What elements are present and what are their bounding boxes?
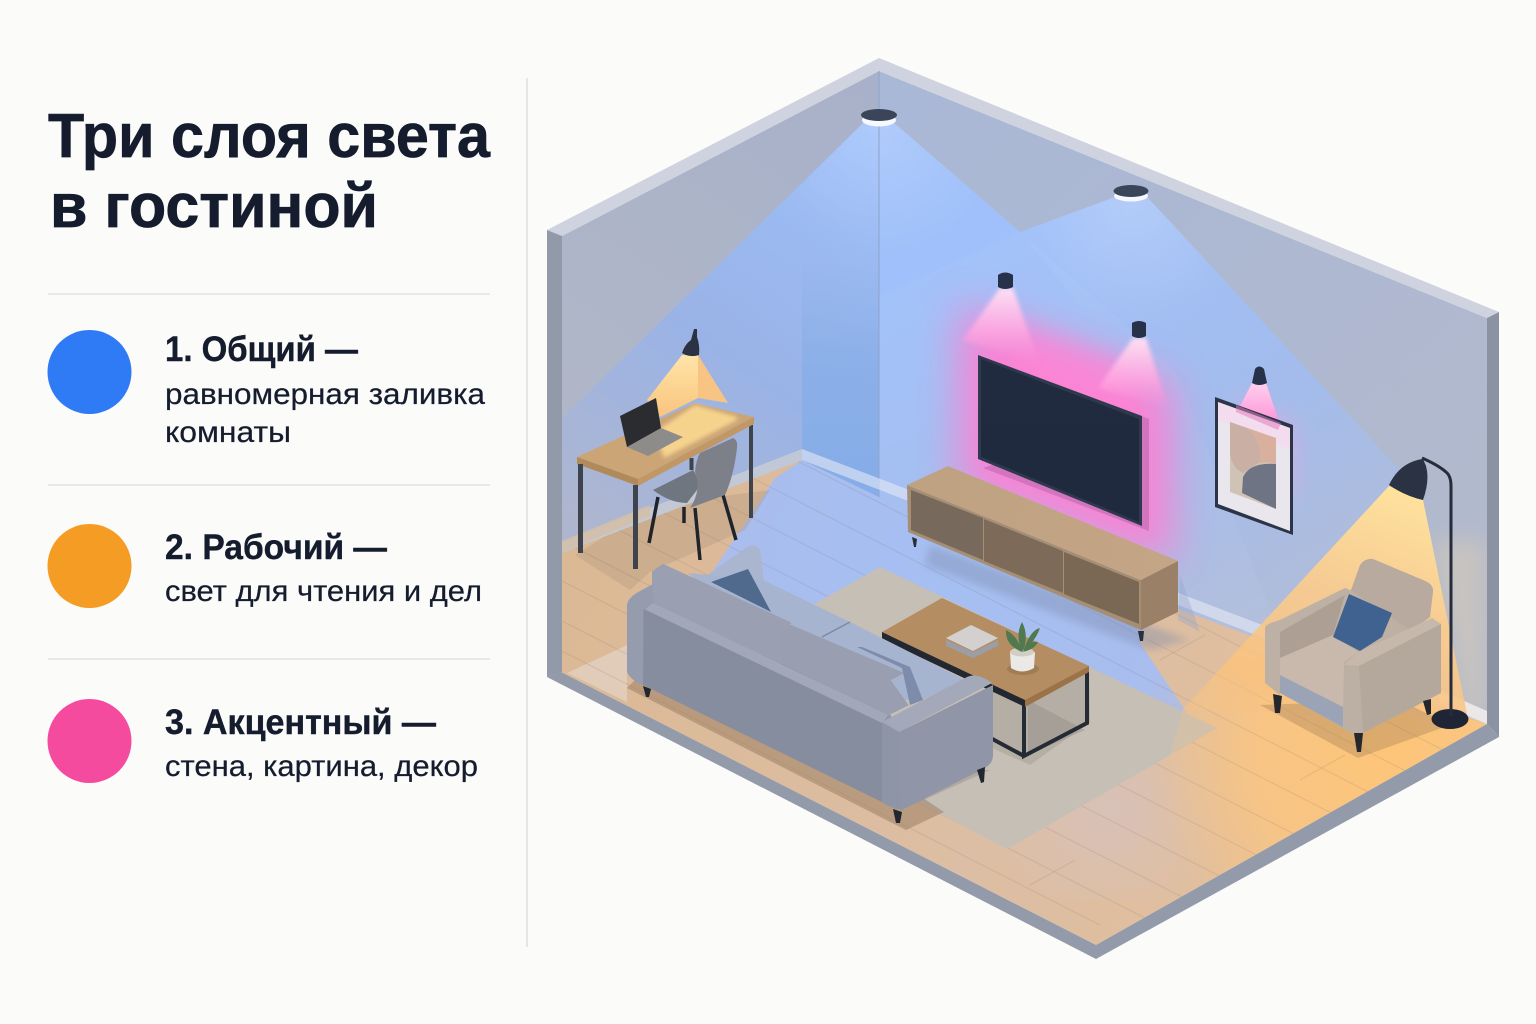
desk lamp beam xyxy=(647,355,728,417)
accent spot 1 xyxy=(998,272,1013,289)
near-side pillow 1 xyxy=(711,569,771,612)
TV console xyxy=(907,466,1190,650)
floor slab edge xyxy=(547,672,1499,959)
ceiling light 2 xyxy=(1114,185,1148,202)
sofa xyxy=(627,546,993,830)
book on table xyxy=(946,625,998,658)
coffee table xyxy=(882,598,1090,765)
legend item: general light: 1. Общий — xyxy=(165,330,358,369)
walls xyxy=(547,58,1499,959)
accent beam 2 xyxy=(1100,336,1164,403)
legend item: general light xyxy=(48,330,485,449)
wall top band xyxy=(547,58,1499,318)
floor lamp beam xyxy=(1183,486,1467,718)
seat xyxy=(688,573,965,700)
isometric room xyxy=(547,58,1500,979)
far arm xyxy=(703,546,765,598)
sofa body base xyxy=(630,598,899,800)
wall end: right xyxy=(1487,312,1499,737)
baseboard xyxy=(562,449,1487,724)
armchair seat xyxy=(1280,635,1358,707)
TV xyxy=(978,355,1149,531)
right arm face xyxy=(899,685,993,810)
legend item: accent light: стена, картина, декор xyxy=(165,750,478,783)
accent spot 2 xyxy=(1132,321,1146,338)
light pool: general light on floor xyxy=(712,460,1188,714)
title: Три слоя света xyxy=(48,102,490,171)
light pool: floor lamp on floor xyxy=(1179,684,1486,870)
wall end: left xyxy=(547,230,562,677)
rug xyxy=(780,567,1217,849)
legend item: general light: комнаты xyxy=(165,416,291,449)
accent beam 1 xyxy=(964,286,1031,348)
potted plant xyxy=(1006,622,1040,675)
floor lamp xyxy=(1389,458,1468,729)
legend item: task light: 2. Рабочий — xyxy=(165,528,387,567)
floor xyxy=(562,460,1487,945)
right arm top xyxy=(882,675,992,732)
back top ledge xyxy=(644,603,888,724)
accent beam 3 xyxy=(1240,383,1278,420)
armchair base xyxy=(1280,675,1343,727)
wall shadow by console xyxy=(1178,575,1200,632)
pillow 2 xyxy=(857,647,923,705)
console legs xyxy=(912,537,1144,641)
back cushion 2 xyxy=(780,625,908,715)
ceiling light 1 xyxy=(861,109,897,126)
legend item: accent light xyxy=(48,699,478,783)
armchair left arm xyxy=(1265,588,1350,695)
armchair body base xyxy=(1265,590,1441,734)
legend item: general light: равномерная заливка xyxy=(165,378,485,411)
back panel xyxy=(643,609,882,802)
desk xyxy=(577,403,754,569)
desk chair xyxy=(649,438,737,560)
legs xyxy=(643,686,985,823)
light pool: lavender tint xyxy=(1038,760,1183,888)
legend item: task light: свет для чтения и дел xyxy=(165,575,482,608)
desk far legs xyxy=(692,425,751,518)
picture frame xyxy=(1215,397,1293,535)
accent light glow xyxy=(960,288,1295,565)
light overlay on rug tip xyxy=(1170,709,1217,755)
legend item: accent light: 3. Акцентный — xyxy=(165,703,436,742)
laptop xyxy=(620,398,683,456)
armchair xyxy=(1260,559,1450,758)
armchair cushion xyxy=(1333,594,1392,651)
back cushion 1 xyxy=(653,565,790,663)
desk lamp xyxy=(682,329,699,356)
sofa shadow xyxy=(627,670,944,830)
left arm xyxy=(627,584,653,685)
ceiling light beams on walls xyxy=(562,71,1487,720)
accent spot 3 xyxy=(1252,366,1267,385)
armchair back xyxy=(1350,559,1433,640)
armchair right arm top xyxy=(1344,618,1441,666)
armchair right arm face xyxy=(1353,624,1441,734)
title xyxy=(48,102,490,241)
panel: legend xyxy=(48,102,490,783)
legend item: task light xyxy=(48,524,482,608)
title: в гостиной xyxy=(50,172,378,241)
